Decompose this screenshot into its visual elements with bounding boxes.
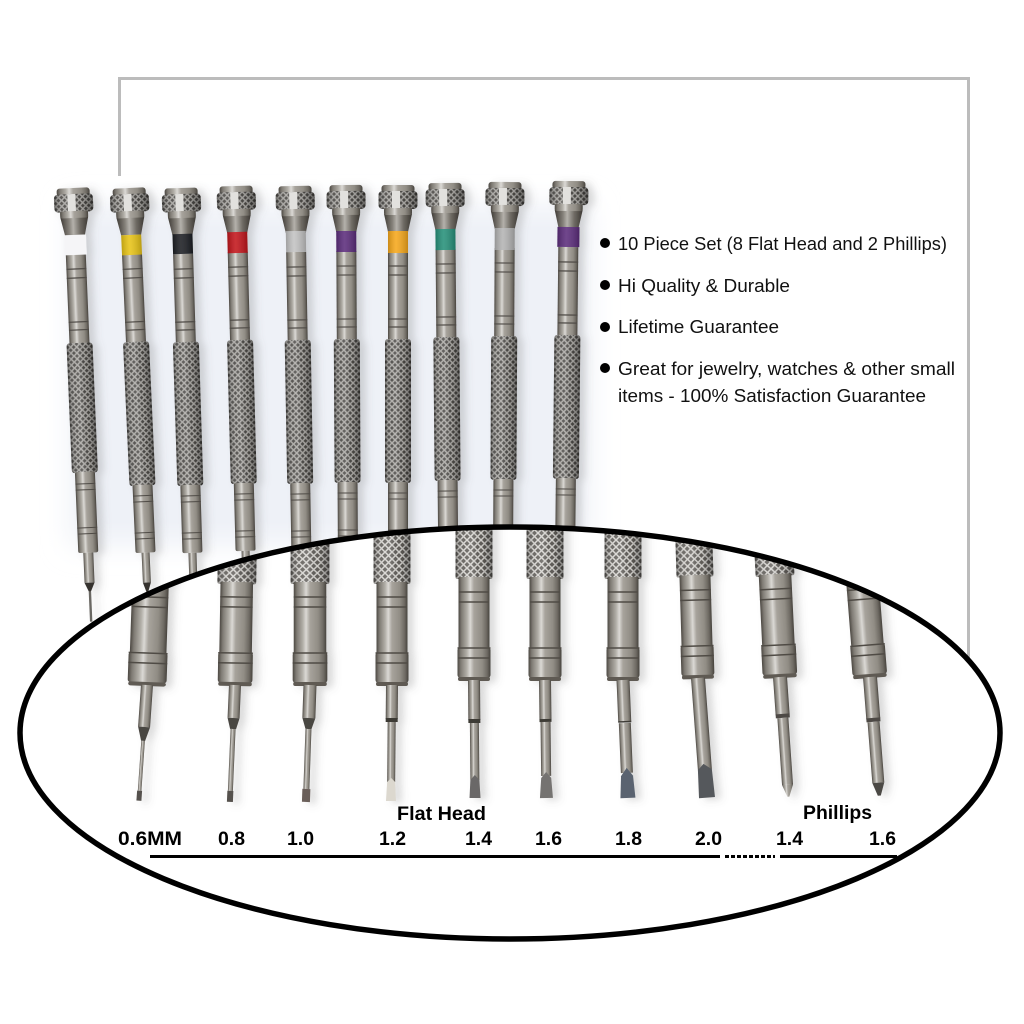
size labels: 1.2 bbox=[379, 829, 406, 850]
size labels: 1.8 bbox=[615, 829, 642, 850]
size labels: 1.0 bbox=[287, 829, 314, 850]
upper row of ten screwdrivers bbox=[54, 181, 588, 622]
pale backdrop behind upper tools bbox=[70, 205, 590, 545]
lower row: close-up of ten screwdriver tips bbox=[111, 510, 899, 803]
bracket line: flat head range bbox=[150, 855, 720, 858]
group label: Phillips: Phillips bbox=[803, 803, 872, 824]
bracket line: Phillips range bbox=[780, 855, 897, 858]
screwdriver 9 with grey band bbox=[483, 182, 524, 616]
black ellipse outline bbox=[20, 527, 1000, 939]
size labels: 1.4 bbox=[465, 829, 492, 850]
tip 0.6mm bbox=[128, 584, 181, 803]
screwdriver 3 with black band bbox=[162, 187, 214, 622]
screwdriver 2 with yellow band bbox=[110, 187, 168, 622]
screwdriver 1 with white band bbox=[54, 187, 111, 622]
tip 1.2mm bbox=[371, 520, 412, 801]
screwdriver 7 with orange band bbox=[378, 185, 418, 619]
size labels: 2.0 bbox=[695, 829, 722, 850]
group label: Flat Head: Flat Head bbox=[397, 804, 486, 825]
bullet: 10 piece set: 10 Piece Set (8 Flat Head and 2 Phillips) bbox=[618, 234, 947, 254]
dotted connector between groups bbox=[725, 855, 775, 858]
size labels: 0.6MM bbox=[118, 829, 182, 850]
tip 1.6mm bbox=[524, 515, 567, 798]
size labels: 1.4 bbox=[776, 829, 803, 850]
screwdriver 4 with red band bbox=[217, 185, 267, 620]
size labels bbox=[118, 829, 896, 850]
tip Phillips 1.6 bbox=[846, 586, 896, 798]
screwdriver 8 with green band bbox=[426, 183, 468, 617]
grey frame outline bbox=[120, 78, 968, 670]
bullet: uses and satisfaction bbox=[600, 359, 955, 406]
size labels: 1.6 bbox=[535, 829, 562, 850]
size labels: 0.8 bbox=[218, 829, 245, 850]
tip 0.8mm bbox=[217, 558, 266, 805]
screwdriver 10 with purple band bbox=[545, 181, 588, 615]
tip 1.0mm bbox=[290, 543, 338, 806]
tip 1.8mm bbox=[604, 534, 650, 803]
screwdriver 5 with grey band bbox=[276, 186, 322, 620]
bullet: uses and satisfaction: Great for jewelry, watches & other small bbox=[618, 359, 955, 379]
ellipse white interior bbox=[20, 527, 1000, 939]
screwdriver 6 with purple band bbox=[327, 185, 368, 619]
feature list bbox=[600, 234, 955, 406]
tip 2.0mm bbox=[675, 542, 723, 802]
tip Phillips 1.4 bbox=[754, 557, 806, 798]
size labels: 1.6 bbox=[869, 829, 896, 850]
bullet: uses and satisfaction: items - 100% Satisfaction Guarantee bbox=[618, 386, 926, 406]
bullet: quality: Hi Quality & Durable bbox=[618, 276, 790, 296]
bullet: guarantee: Lifetime Guarantee bbox=[618, 317, 779, 337]
tip 1.4mm bbox=[454, 515, 495, 798]
